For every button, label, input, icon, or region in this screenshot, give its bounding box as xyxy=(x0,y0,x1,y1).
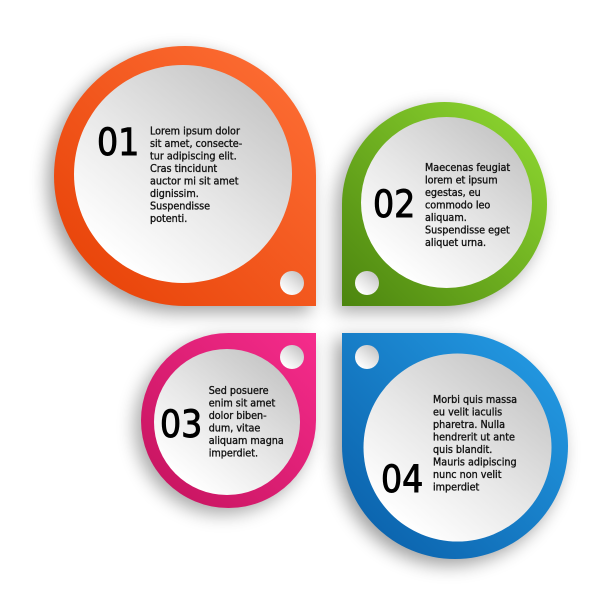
number 02: 02 xyxy=(373,183,415,226)
dot: orange panel xyxy=(280,271,304,295)
text block: blue panel: imperdiet xyxy=(433,480,480,494)
text block: pink panel: dolor biben- xyxy=(209,409,267,422)
text block: orange panel: Suspendisse xyxy=(150,200,210,212)
text block: blue panel: hendrerit ut ante xyxy=(433,430,515,444)
teardrop: green xyxy=(342,102,547,306)
text block: blue panel: Mauris adipiscing xyxy=(433,456,517,468)
text block: orange panel: Cras tincidunt xyxy=(150,162,217,175)
number 01: 01 xyxy=(97,121,139,164)
text block: blue panel: quis blandit. xyxy=(433,443,492,456)
teardrop: orange xyxy=(54,46,316,306)
panel: 01 orange teardrop xyxy=(48,46,316,312)
dot: blue panel xyxy=(355,345,379,369)
teardrop: pink xyxy=(141,333,316,508)
text block: green panel: aliquet urna. xyxy=(425,236,486,249)
dot: pink panel xyxy=(280,345,304,369)
text block: pink panel: imperdiet. xyxy=(209,446,258,460)
text block: green panel: aliquam. xyxy=(425,211,467,224)
shadow: orange panel xyxy=(48,52,310,312)
text block: orange panel: sit amet, consecte- xyxy=(150,137,242,150)
panel: 02 green teardrop xyxy=(336,102,547,312)
number 03: 03 xyxy=(160,403,202,446)
text block: green panel: Suspendisse eget xyxy=(425,224,510,236)
text block: pink panel: enim sit amet xyxy=(209,396,275,410)
text block: pink panel: Sed posuere xyxy=(209,384,269,397)
dot: green panel xyxy=(355,271,379,295)
panel: 03 pink teardrop xyxy=(135,333,316,514)
text block: blue panel: Morbi quis massa xyxy=(433,393,517,406)
inner circle: pink panel xyxy=(154,349,300,495)
text block: green panel: egestas, eu xyxy=(425,186,481,199)
text block: pink panel: aliquam magna xyxy=(209,434,284,447)
text block: orange panel: Lorem ipsum dolor xyxy=(150,124,240,138)
text block: pink panel: dum, vitae xyxy=(209,422,260,434)
text block: green panel: commodo leo xyxy=(425,198,490,212)
shadow: green panel xyxy=(336,108,541,312)
text block: orange panel: tur adipiscing elit. xyxy=(150,150,237,162)
panel: 04 blue teardrop xyxy=(336,333,568,565)
text block: orange panel: dignissim. xyxy=(150,187,199,200)
text block: green panel: lorem et ipsum xyxy=(425,174,498,186)
text block: green panel: Maecenas feugiat xyxy=(425,161,510,174)
text block: blue panel: nunc non velit xyxy=(433,468,502,481)
text block: blue panel: pharetra. Nulla xyxy=(433,418,505,431)
teardrop: blue xyxy=(342,333,568,559)
text block: orange panel: auctor mi sit amet xyxy=(150,174,239,188)
inner circle: blue panel xyxy=(364,354,552,542)
inner circle: orange panel xyxy=(74,65,292,283)
text block: blue panel: eu velit iaculis xyxy=(433,406,502,418)
shadow: blue panel xyxy=(336,339,562,565)
text block: orange panel: potenti. xyxy=(150,212,187,225)
shadow: pink panel xyxy=(135,339,310,514)
number 04: 04 xyxy=(381,458,423,501)
inner circle: green panel xyxy=(361,117,532,288)
